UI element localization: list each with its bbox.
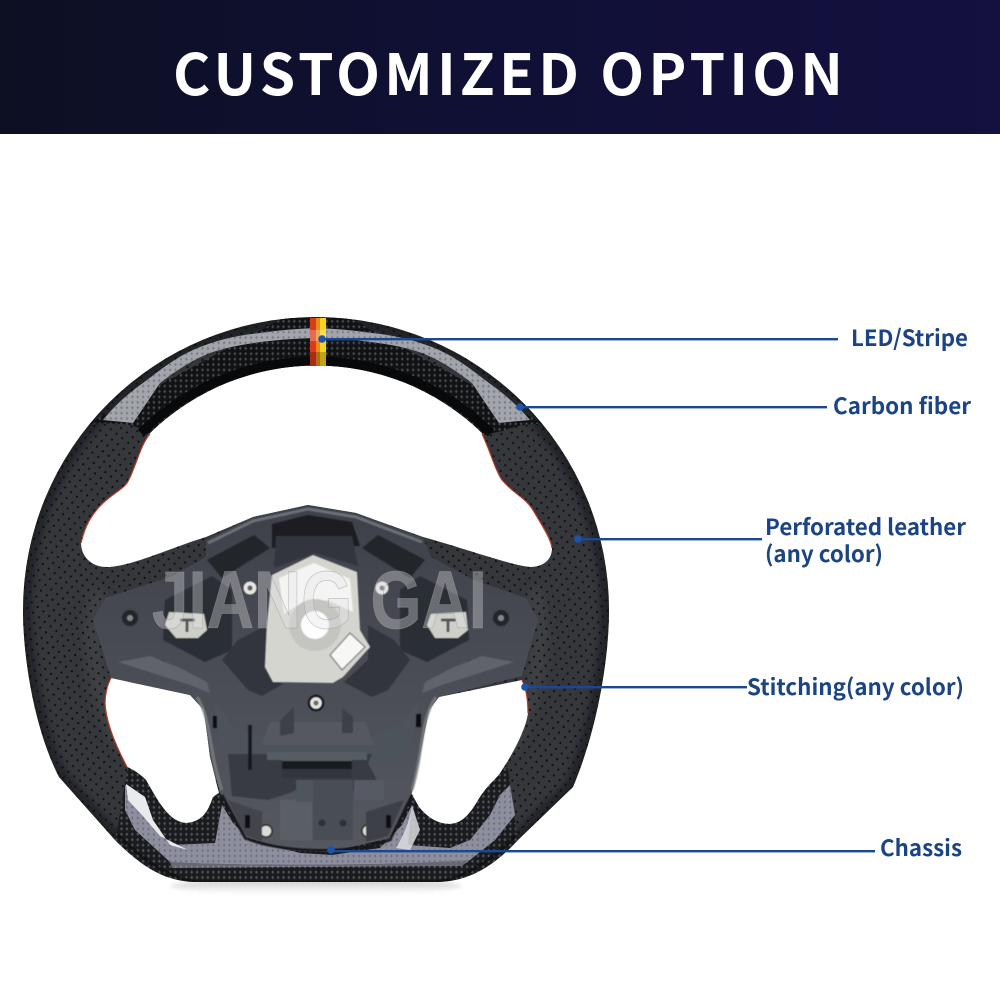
steering wheel [0, 300, 971, 900]
callout: Carbon fiber: Carbon fiber [833, 389, 971, 421]
dark outer edge [92, 388, 540, 421]
dark inner edge [141, 361, 491, 433]
hub top rim [208, 509, 422, 543]
red stitching [81, 434, 552, 767]
hub lower column [118, 656, 514, 850]
hub details [118, 509, 514, 850]
bolts [122, 582, 509, 837]
callout: LED/Stripe: LED/Stripe [851, 321, 968, 353]
watermark: JIANG GAI [152, 555, 487, 646]
header banner [0, 0, 1000, 134]
callout: Chassis [327, 831, 962, 863]
callout: Perforated leather: (any color) [765, 537, 883, 569]
leather grip [23, 317, 609, 882]
ground shadow under wheel [170, 878, 462, 894]
carbon fiber chassis [115, 767, 518, 882]
callout: LED/Stripe [318, 321, 968, 353]
callout: Perforated leather: Perforated leather [765, 510, 966, 542]
silver chassis area [125, 785, 515, 865]
title: CUSTOMIZED OPTION [173, 30, 843, 112]
callout: Chassis: Chassis [880, 831, 962, 863]
callout: Carbon fiber [516, 389, 971, 421]
carbon fiber top rim [90, 317, 542, 436]
callout: Perforated leather [574, 510, 966, 569]
side plates [165, 612, 207, 638]
callout: Stitching: Stitching(any color) [747, 670, 964, 702]
silver reflection band [103, 328, 530, 423]
colored stripe [310, 318, 326, 366]
metal plate [265, 555, 370, 683]
callout: Stitching [521, 670, 964, 702]
hub plastic [93, 505, 538, 852]
dark recesses [163, 576, 469, 662]
bright reflections [126, 784, 188, 850]
bottom shadow [118, 835, 516, 882]
